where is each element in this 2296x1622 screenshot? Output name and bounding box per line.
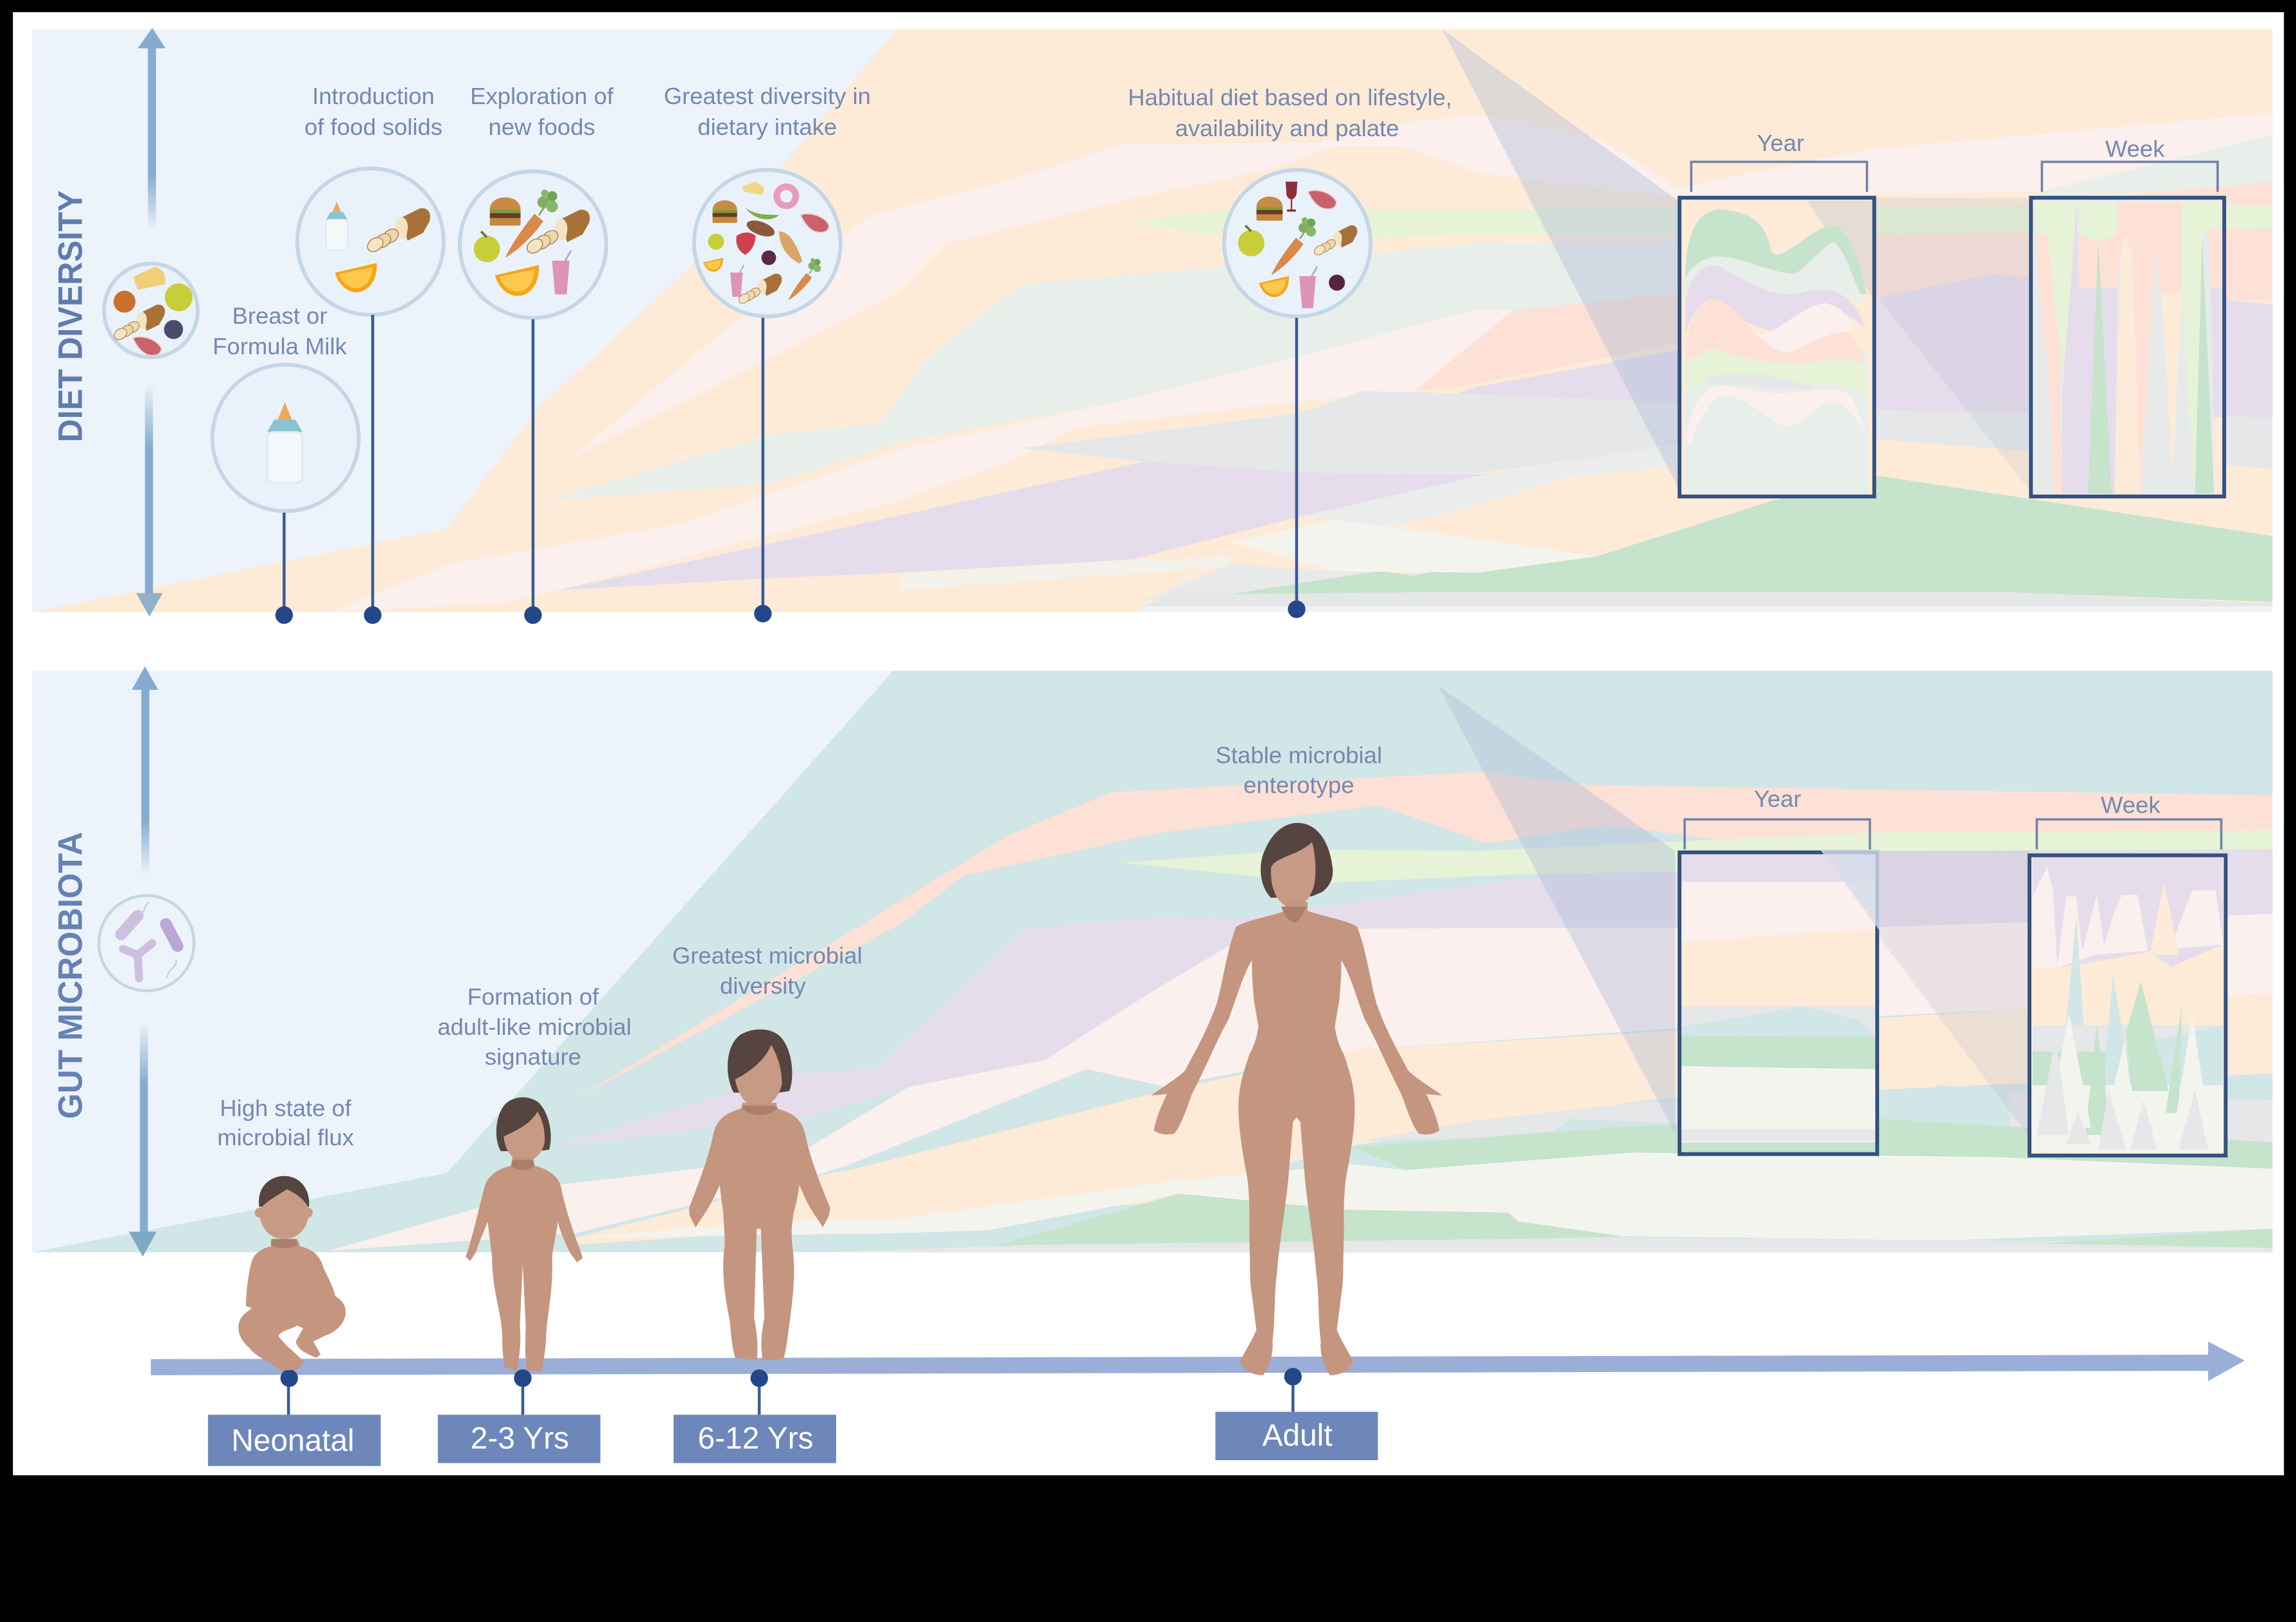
arrow: diet diversity axis (136, 28, 166, 617)
chart: diet week stream (2031, 162, 2224, 497)
label: greatest microbial diversity: diversity (720, 973, 807, 999)
panel: gut microbiota stream graph (32, 671, 2272, 1252)
label: greatest diversity in dietary intake: dietary intake (697, 114, 837, 140)
heading: diet diversity: DIET DIVERSITY (53, 190, 90, 443)
label: formation of adult-like microbial signature: adult-like microbial (437, 1014, 631, 1040)
bracket: diet week (2042, 162, 2218, 192)
tag: 6-12 yrs: 6-12 Yrs (697, 1422, 813, 1456)
marker: 2-3 yrs (514, 1370, 532, 1415)
label: Year microbiota: Year (1754, 786, 1801, 812)
label: breast or formula milk: Breast or (232, 303, 327, 329)
label: stable microbial enterotype: enterotype (1243, 772, 1354, 798)
frame: diet year box (1679, 198, 1874, 497)
label: habitual diet: Habitual diet based on lifestyle, (1128, 84, 1452, 110)
heading: gut microbiota: GUT MICROBIOTA (53, 832, 90, 1119)
icon: new foods circle (460, 172, 606, 318)
frame: microbiota year box (1679, 852, 1877, 1154)
label: greatest diversity in dietary intake: Greatest diversity in (664, 83, 871, 109)
marker: 6-12 yrs (751, 1370, 768, 1415)
marker: habitual diet timeline (1288, 318, 1306, 618)
chart: microbiota year stream (1679, 820, 1880, 1154)
icon: microbes circle (99, 895, 194, 991)
label: greatest microbial diversity: Greatest microbial (672, 942, 863, 969)
frame: diet week box (2031, 198, 2224, 497)
icon: habitual diet circle (1224, 170, 1371, 316)
figure: child (689, 1029, 830, 1361)
label: formation of adult-like microbial signature: signature (485, 1043, 581, 1070)
figure: adult (1151, 823, 1442, 1375)
tag: 2-3 yrs: 2-3 Yrs (471, 1422, 569, 1456)
marker: food solids timeline (364, 315, 381, 624)
label: high state of microbial flux: microbial flux (217, 1124, 354, 1150)
label: Week microbiota: Week (2101, 791, 2160, 818)
marker: neonatal (281, 1370, 298, 1415)
label: Year diet: Year (1757, 130, 1804, 156)
tag: 6-12 yrs (674, 1415, 836, 1463)
marker: adult (1284, 1368, 1302, 1412)
bracket: microbiota week (2037, 820, 2222, 849)
label: stable microbial enterotype: Stable microbial (1216, 742, 1382, 768)
chart: diet year stream (1679, 162, 1874, 498)
marker: milk timeline (276, 513, 293, 624)
label: high state of microbial flux: High state of (220, 1095, 351, 1121)
label: exploration of new foods: new foods (488, 114, 595, 140)
tag: neonatal (208, 1415, 381, 1466)
frame: microbiota week box (2029, 855, 2226, 1156)
figure: toddler (466, 1097, 583, 1371)
label: Week diet: Week (2105, 136, 2165, 162)
tag: 2-3 yrs (438, 1415, 600, 1463)
marker: greatest diversity timeline (754, 318, 772, 622)
icon: greatest diversity circle (694, 170, 841, 316)
marker: new foods timeline (524, 319, 542, 624)
label: breast or formula milk: Formula Milk (213, 333, 347, 360)
tag: adult (1215, 1412, 1378, 1460)
icon: milk bottle circle (213, 365, 359, 511)
label: formation of adult-like microbial signature: Formation of (468, 983, 599, 1010)
label: habitual diet: availability and palate (1175, 115, 1399, 141)
icon: food solids circle (297, 168, 444, 315)
chart: microbiota week stream (2029, 820, 2226, 1156)
figure: neonate (238, 1176, 346, 1371)
panel: diet diversity stream graph (32, 30, 2272, 612)
label: introduction of food solids: Introduction (312, 83, 435, 109)
arrow: gut microbiota axis (129, 666, 158, 1256)
tag: neonatal: Neonatal (231, 1424, 355, 1458)
tag: adult: Adult (1263, 1418, 1333, 1452)
bracket: diet year (1691, 162, 1867, 192)
label: exploration of new foods: Exploration of (470, 83, 613, 109)
label: introduction of food solids: of food solids (304, 114, 443, 140)
arrow: life stage timeline (151, 1341, 2245, 1381)
icon: diet diversity plate (104, 263, 198, 357)
bracket: microbiota year (1685, 820, 1870, 849)
